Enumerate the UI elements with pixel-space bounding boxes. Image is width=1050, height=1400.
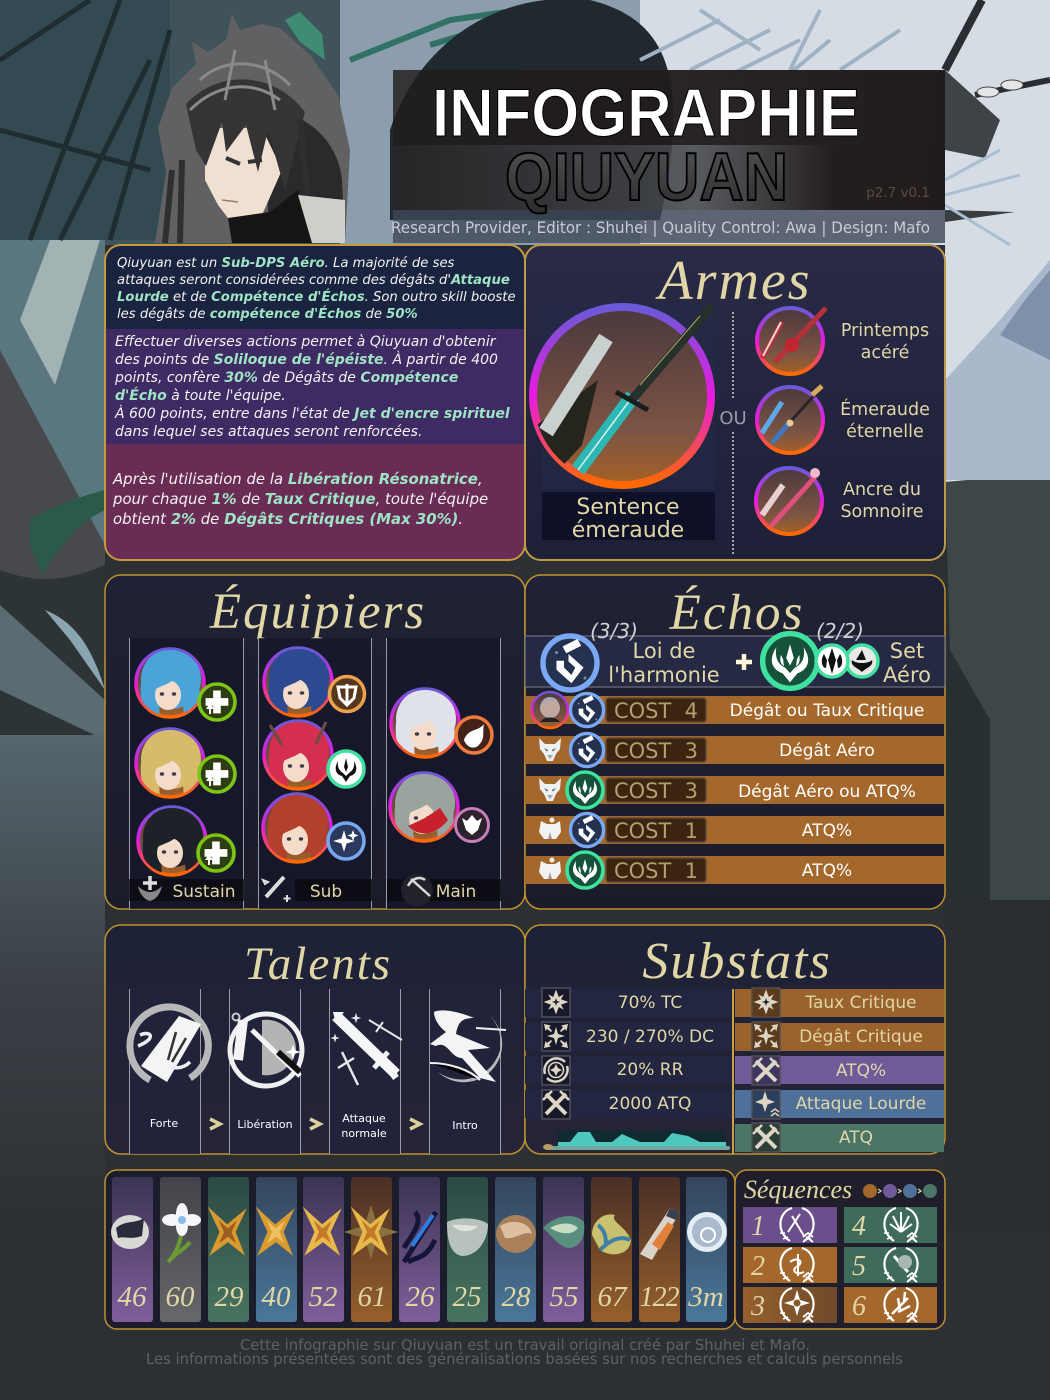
echo row: cost 1 aero: COST 1 [614, 859, 698, 883]
echo row: cost 1: ATQ% [802, 821, 852, 841]
material: shell disc 3m [686, 1177, 727, 1322]
sequence 3: 3 [750, 1291, 765, 1322]
echo row: cost 3 aero atk: Dégât Aéro ou ATQ% [738, 782, 916, 802]
footer: credits: Cette infographie sur Qiuyuan est un travail original créé par Shuhei et Mafo. [240, 1336, 810, 1354]
priority stats list: Dégât Critique [799, 1027, 923, 1047]
label: Emeraude [840, 398, 930, 442]
material: star 40 [256, 1177, 297, 1322]
panel: sequences [735, 1170, 945, 1329]
icon: main weapon [530, 306, 712, 485]
column: Sub: Sub [310, 882, 342, 902]
echo set header: Aéro [883, 663, 931, 687]
avatar: sub red [264, 721, 364, 791]
text block: summary: Qiuyuan est un Sub-DPS Aéro. La majorité de ses [117, 256, 454, 271]
panel: weapons [525, 245, 945, 560]
column: Sub [263, 648, 372, 902]
material: shell 55 [543, 1177, 584, 1322]
icon: weapon Emeraude [757, 386, 823, 453]
panel: materials [105, 1170, 735, 1329]
material: shell disc 3m: 3m [687, 1281, 724, 1313]
sequence 5: 5 [852, 1251, 866, 1282]
heading: Échos: Échos [669, 585, 804, 641]
label: normal attack: normale [341, 1127, 387, 1140]
text block: summary: les dégâts de compétence d'Échos de 50% [117, 307, 418, 322]
material: tube 122: 122 [640, 1282, 680, 1313]
text block: forte mechanics: À 600 points, entre dans l'état de Jet d'encre spirituel [115, 406, 510, 422]
heading: Armes: Armes [654, 250, 812, 312]
target stats list: 2000 ATQ [609, 1094, 691, 1114]
material: flower 60: 60 [166, 1281, 195, 1313]
avatar: main white [391, 689, 492, 759]
footer: credits [146, 1336, 903, 1368]
header: title banner [391, 70, 945, 243]
echo row: cost 4 [525, 692, 945, 728]
column: Main: Main [436, 882, 476, 902]
avatar: main gray [390, 773, 488, 843]
column: Sustain [129, 649, 244, 902]
material: plume 26: 26 [406, 1281, 435, 1313]
text block: summary: attaques seront considérées comme des dégâts d'Attaque [117, 273, 510, 288]
sequence 6: 6 [852, 1291, 866, 1322]
panel: talents [105, 925, 525, 1154]
material: star 52: 52 [308, 1281, 338, 1313]
priority stats list: Attaque Lourde [796, 1094, 926, 1114]
text block: team buff: pour chaque 1% de Taux Critique, toute l'équipe [113, 490, 488, 508]
echo set header [525, 619, 945, 690]
lines [0, 0, 170, 240]
label: Printemps: acéré [861, 343, 909, 363]
echo row: cost 3 aero atk: COST 3 [614, 779, 698, 803]
icon: liberation [230, 1014, 302, 1086]
material: pendant 46: 46 [118, 1281, 147, 1313]
priority stats list: ATQ% [836, 1061, 886, 1081]
text block: forte mechanics: d'Écho à toute l'équipe. [115, 388, 286, 404]
avatar: healer blue [136, 649, 235, 720]
material: swirl 67 [591, 1177, 632, 1322]
sequence 3 [743, 1287, 837, 1323]
heading: Substats: Substats [642, 933, 832, 990]
legend: colour order [863, 1184, 937, 1198]
icon: character portrait [155, 12, 350, 243]
material: shell 55: 55 [550, 1281, 578, 1313]
title: QIUYUAN: QIUYUAN [505, 139, 788, 215]
material: shell 25 [447, 1177, 488, 1322]
credits: Research Provider, Editor : Shuhei | Quality Control: Awa | Design: Mafo [391, 218, 930, 237]
footer: credits: Les informations présentées sont des généralisations basées sur nos recherches et calculs personnels [146, 1350, 903, 1368]
label: Ancre: Ancre du [843, 480, 921, 500]
text block: summary: Lourde et de Compétence d'Échos. Son outro skill booste [117, 290, 516, 305]
label: Printemps: Printemps [841, 321, 929, 341]
arrows: priority [210, 1119, 420, 1129]
material: shell 28 [495, 1177, 536, 1322]
priority stats list: Taux Critique [804, 993, 917, 1013]
sequence 6 [844, 1287, 937, 1323]
heading: Talents: Talents [244, 938, 392, 990]
text block: forte mechanics: points, confère 30% de Dégâts de Compétence [115, 370, 458, 386]
icon: weapon Ancre [756, 468, 822, 534]
echo row: cost 3 aero atk [525, 772, 945, 808]
echo set header: (3/3) [590, 619, 638, 643]
heading: Séquences: Séquences [744, 1175, 852, 1204]
icon: energy rotation bar [543, 1130, 730, 1150]
material: star 61: 61 [358, 1281, 386, 1313]
avatar: healer dark [138, 807, 234, 877]
echo row: cost 1 aero [525, 852, 945, 888]
title: INFOGRAPHIE: INFOGRAPHIE [432, 75, 860, 151]
material: shell 28: 28 [502, 1281, 531, 1313]
echo row: cost 1: COST 1 [614, 819, 698, 843]
text block: forte mechanics: Effectuer diverses actions permet à Qiuyuan d'obtenir [115, 334, 497, 350]
label: main weapon: émeraude [572, 518, 684, 543]
label: main weapon: Sentence [576, 495, 680, 520]
avatar: sub redhead [263, 794, 364, 864]
sequence 1 [743, 1207, 837, 1243]
panel: intro description [105, 245, 525, 560]
material: star 40: 40 [262, 1281, 291, 1313]
icon: weapon Printemps [757, 308, 826, 374]
version: p2.7 v0.1 [866, 185, 930, 201]
text block: team buff: obtient 2% de Dégâts Critiques (Max 30%). [113, 510, 463, 528]
panel: echoes [525, 575, 945, 909]
material: swirl 67: 67 [598, 1281, 628, 1313]
icon: normal attack [330, 1012, 402, 1085]
material: shell 25: 25 [452, 1281, 482, 1313]
text block: team buff: Après l'utilisation de la Libération Résonatrice, [113, 470, 483, 488]
sequence 2 [743, 1247, 837, 1283]
label: normal attack: Attaque [342, 1112, 386, 1125]
echo row: cost 3 aero: COST 3 [614, 739, 698, 763]
panel: substats [525, 925, 945, 1154]
echo row: cost 3 aero: Dégât Aéro [779, 741, 875, 761]
label: normal attack [341, 1112, 387, 1140]
echo set header: (2/2) [816, 619, 864, 643]
panel: teammates [105, 575, 525, 909]
sequence 1: 1 [751, 1211, 765, 1242]
avatar: sub blue [264, 648, 364, 718]
target stats list [525, 988, 731, 1119]
icon: intro [430, 1010, 506, 1082]
label: Emeraude: éternelle [846, 422, 924, 442]
material: pendant 46 [111, 1177, 153, 1322]
column: Main [387, 689, 501, 906]
label: or: OU [719, 408, 747, 429]
sequence 5 [844, 1247, 937, 1283]
echo set header: Loi de [633, 639, 695, 663]
material: flower 60 [160, 1177, 201, 1322]
icon: forte [130, 1007, 208, 1082]
sequence 4: 4 [852, 1211, 866, 1242]
label: Ancre [840, 480, 924, 522]
target stats list: 20% RR [617, 1060, 684, 1080]
heading: Équipiers: Équipiers [209, 584, 426, 640]
label: Ancre: Somnoire [840, 502, 924, 522]
echo row: cost 1 [525, 813, 945, 847]
echo row: cost 4: COST 4 [614, 699, 698, 723]
sequence 2: 2 [751, 1251, 765, 1282]
material: tube 122 [639, 1177, 680, 1322]
label: forte: Forte [150, 1117, 178, 1130]
echo row: cost 1 aero: ATQ% [802, 861, 852, 881]
material: star 52 [303, 1177, 344, 1322]
label: main weapon [542, 492, 715, 543]
label: Printemps [841, 321, 929, 363]
target stats list: 70% TC [618, 993, 682, 1013]
text block: forte mechanics: dans lequel ses attaques seront renforcées. [115, 424, 422, 440]
text block: forte mechanics: des points de Soliloque de l'épéiste. À partir de 400 [115, 352, 498, 368]
material: plume 26 [399, 1177, 440, 1322]
avatar: healer blonde [136, 729, 235, 799]
column: Sustain: Sustain [172, 882, 236, 902]
label: intro: Intro [452, 1119, 478, 1132]
label: liberation: Libération [237, 1118, 293, 1131]
echo set header: Set [890, 639, 924, 663]
target stats list: 230 / 270% DC [586, 1027, 714, 1047]
echo row: cost 3 aero [525, 733, 945, 767]
material: star 29: 29 [214, 1281, 244, 1313]
priority stats list: ATQ [839, 1128, 873, 1148]
material: star 29 [208, 1177, 249, 1322]
material: star 61 [344, 1177, 398, 1322]
priority stats list [735, 988, 944, 1152]
sequence 4 [844, 1207, 937, 1243]
echo row: cost 4: Dégât ou Taux Critique [730, 701, 924, 721]
echo set header: l'harmonie [608, 663, 720, 687]
label: Emeraude: Émeraude [840, 398, 930, 420]
